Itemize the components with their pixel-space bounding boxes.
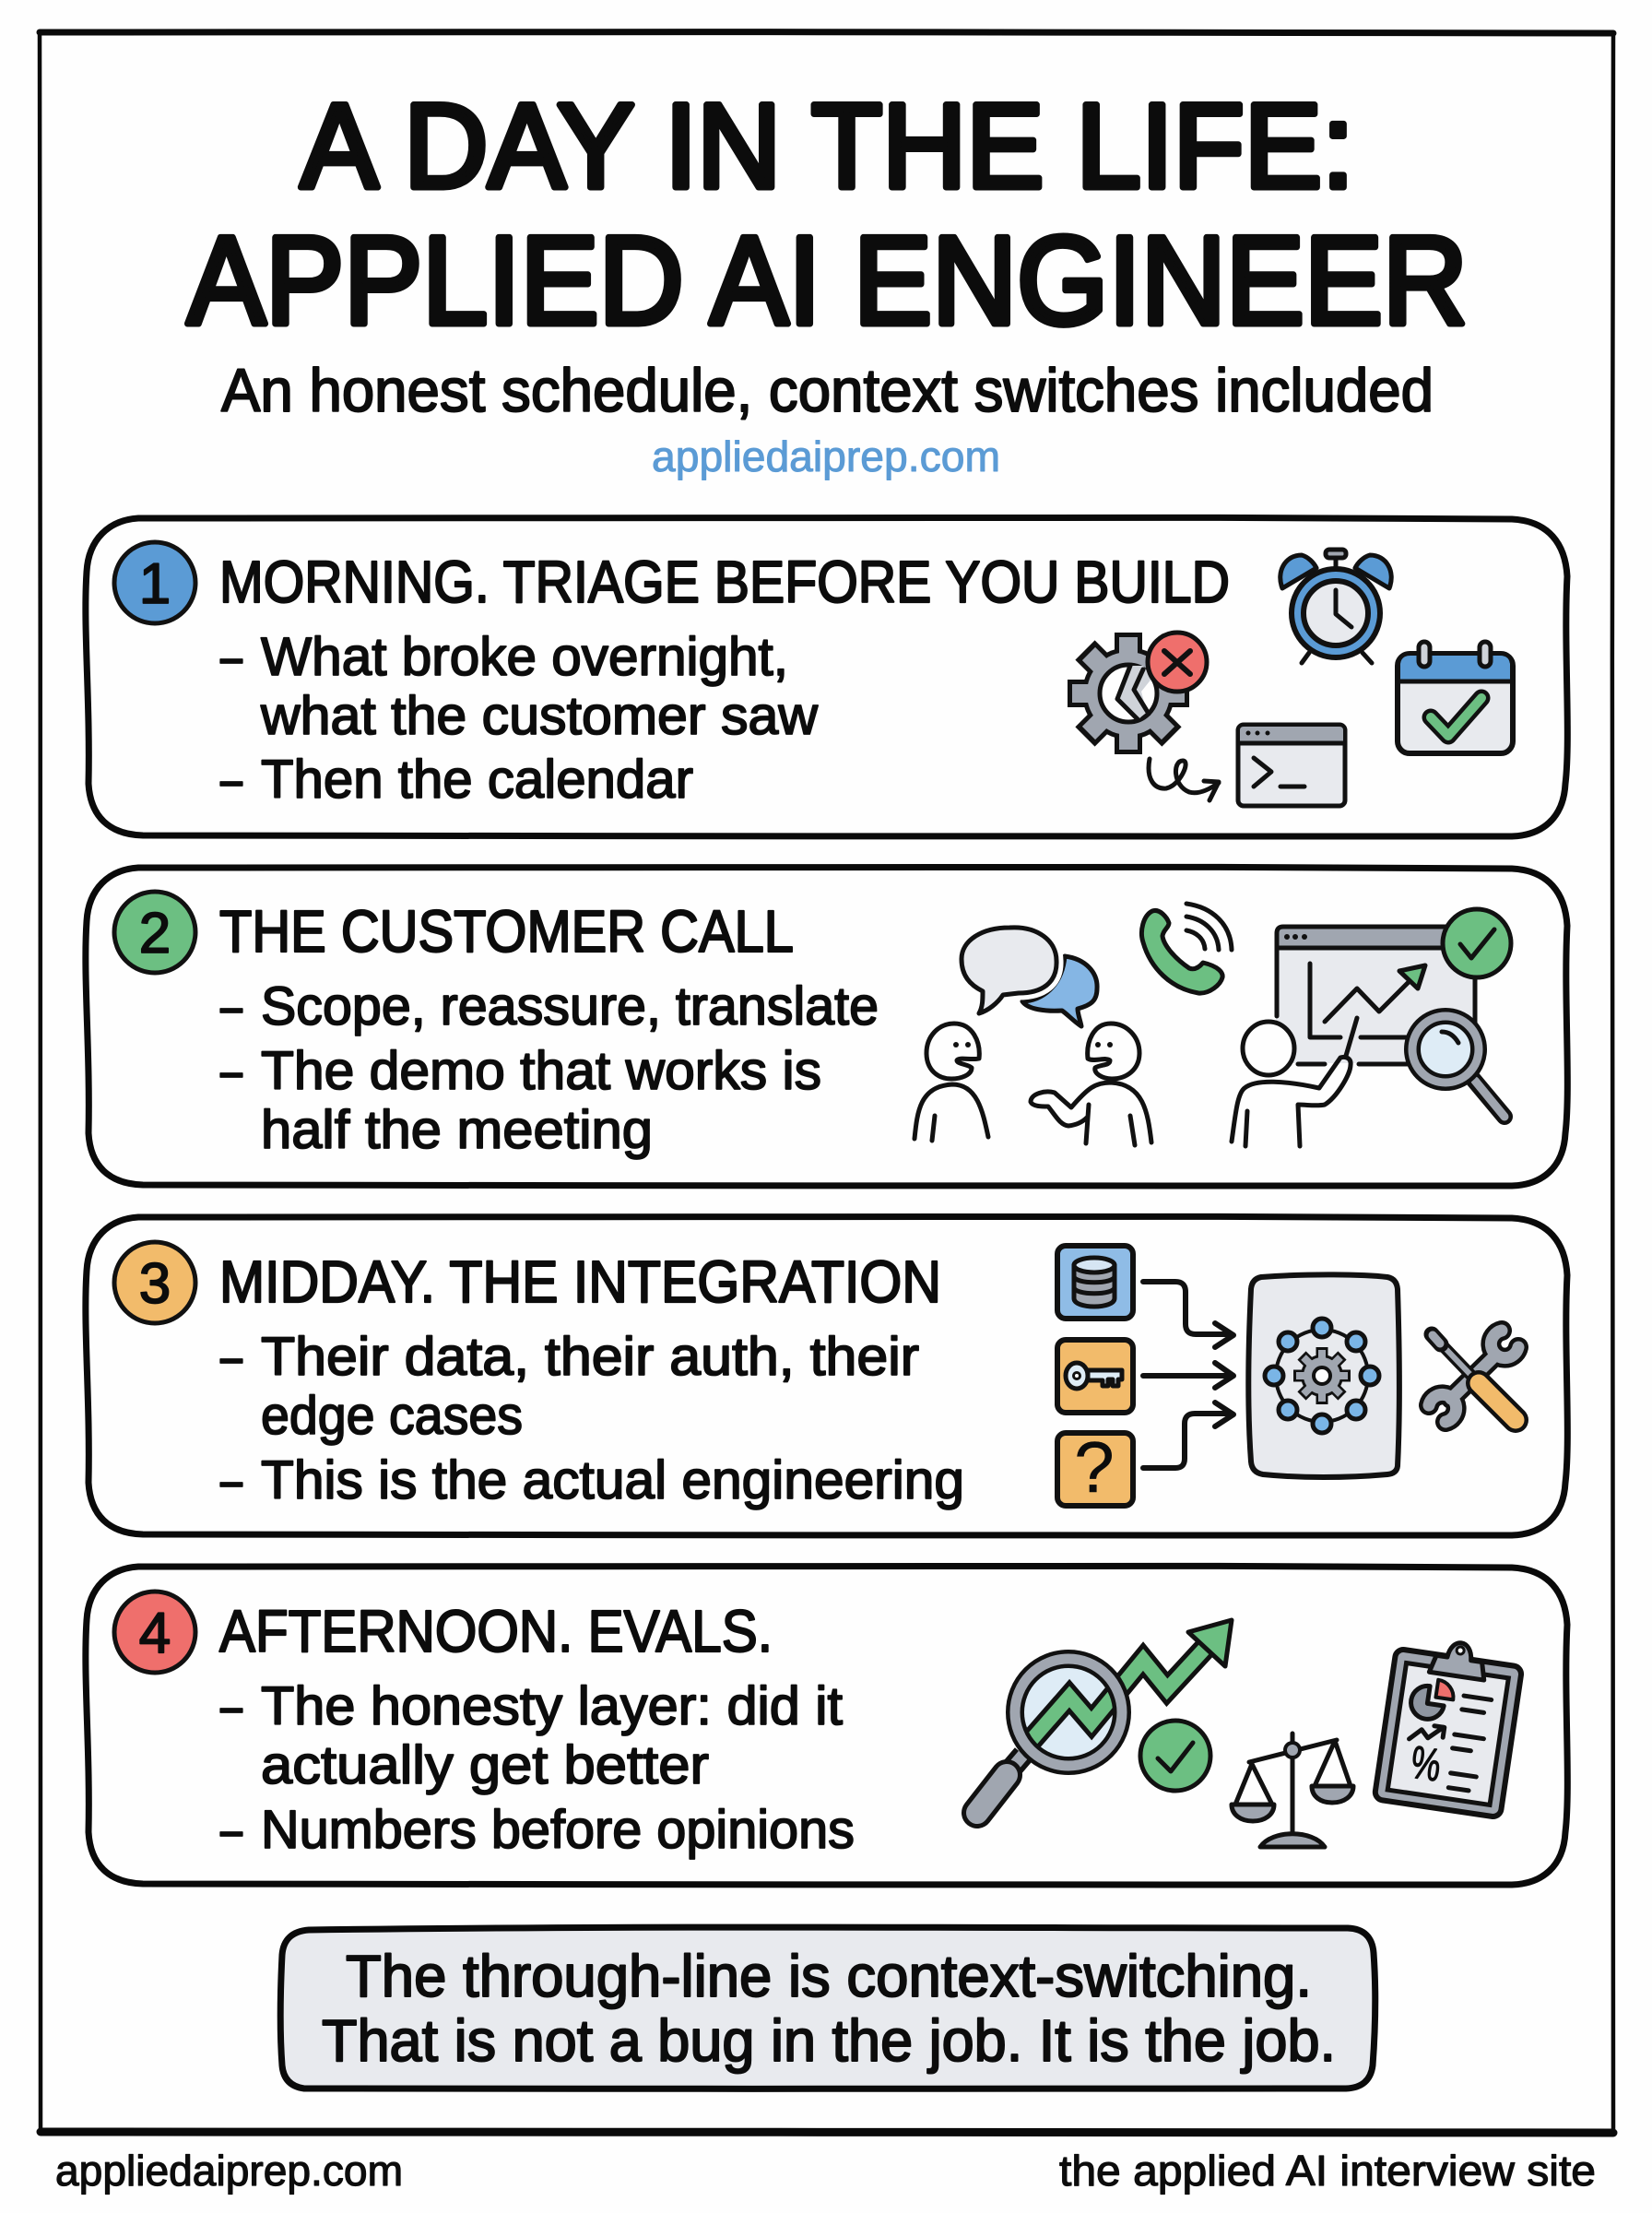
icon: speech bubbles — [962, 928, 1097, 1026]
bullet list: Then the calendar — [261, 750, 693, 810]
bullet list: This is the actual engineering — [261, 1450, 964, 1510]
icon: squiggle arrow — [1149, 759, 1219, 800]
bullet list: The honesty layer: did it — [261, 1676, 843, 1736]
heading: MORNING. TRIAGE BEFORE YOU BUILD — [219, 549, 1230, 615]
icon: two people talking — [914, 1024, 1151, 1145]
bullet list: The demo that works is — [261, 1041, 821, 1101]
number badge 4: 4 — [139, 1602, 171, 1665]
bullet list: – — [220, 1327, 243, 1387]
panel: afternoon evals — [86, 1566, 1567, 1885]
footer right: tagline: the applied AI interview site — [1059, 2147, 1596, 2195]
bullet list: – — [220, 1800, 243, 1860]
panel: midday integration — [86, 1216, 1567, 1535]
title — [187, 78, 1468, 350]
number badge 4 — [114, 1592, 195, 1673]
arrows into integration card — [1143, 1282, 1233, 1468]
bullet list — [220, 976, 879, 1160]
callout: takeaway — [280, 1927, 1375, 2089]
panel: customer call — [86, 867, 1567, 1186]
icon: balance scale — [1232, 1734, 1353, 1847]
icon: crossed tools — [1429, 1331, 1518, 1422]
network ring — [1265, 1319, 1379, 1433]
heading: MIDDAY. THE INTEGRATION — [219, 1249, 941, 1315]
number badge 3 — [114, 1242, 195, 1323]
bullet list: – — [220, 1676, 243, 1736]
center gear — [1293, 1347, 1351, 1404]
icon: check badge — [1140, 1721, 1210, 1791]
bullet list: – — [220, 1450, 243, 1510]
bullet list — [220, 627, 819, 810]
icon: broken gear with error badge — [1068, 633, 1207, 754]
icon: key box — [1057, 1340, 1133, 1413]
bullet list: – — [220, 627, 243, 687]
callout: takeaway: That is not a bug in the job. It is the job. — [322, 2007, 1336, 2074]
number badge 1: 1 — [139, 552, 171, 616]
bullet list — [220, 1676, 855, 1860]
subtitle: An honest schedule, context switches included — [221, 356, 1434, 424]
bullet list: actually get better — [261, 1735, 709, 1795]
heading: AFTERNOON. EVALS. — [219, 1598, 773, 1664]
bullet list: Scope, reassure, translate — [261, 976, 879, 1036]
icon: clipboard report — [1375, 1634, 1525, 1817]
title: A DAY IN THE LIFE: — [301, 78, 1354, 213]
heading: THE CUSTOMER CALL — [219, 898, 794, 964]
bullet list: Numbers before opinions — [261, 1800, 855, 1860]
bullet list: half the meeting — [261, 1100, 653, 1160]
bullet list: – — [220, 750, 243, 810]
panel: morning — [86, 517, 1567, 836]
icon: magnifier over rising chart arrow — [977, 1620, 1232, 1813]
bullet list — [220, 1327, 964, 1510]
number badge 2: 2 — [139, 902, 171, 965]
icon: terminal window — [1238, 725, 1345, 806]
icon: phone with signal — [1141, 904, 1232, 993]
bullet list: – — [220, 1041, 243, 1101]
number badge 2 — [114, 892, 195, 973]
number badge 1 — [114, 542, 195, 623]
bullet list: edge cases — [261, 1386, 523, 1446]
title: APPLIED AI ENGINEER — [187, 210, 1468, 350]
bullet list: what the customer saw — [260, 686, 819, 746]
icon: alarm clock — [1280, 550, 1391, 663]
icon: question box — [1057, 1426, 1133, 1508]
website link: appliedaiprep.com — [652, 432, 1000, 480]
icon: question box: ? — [1074, 1426, 1115, 1508]
icon: calendar with check — [1398, 642, 1513, 753]
icon: integration card — [1248, 1274, 1399, 1477]
number badge 3: 3 — [139, 1252, 171, 1316]
icon: presenter with chart window — [1232, 909, 1511, 1146]
footer left: site: appliedaiprep.com — [55, 2147, 403, 2195]
bullet list: – — [220, 976, 243, 1036]
icon: clipboard report: % — [1408, 1736, 1445, 1792]
bullet list: Their data, their auth, their — [261, 1327, 919, 1387]
bullet list: What broke overnight, — [261, 627, 788, 687]
callout: takeaway: The through-line is context-switching. — [346, 1943, 1312, 2009]
icon: database box — [1057, 1246, 1133, 1319]
